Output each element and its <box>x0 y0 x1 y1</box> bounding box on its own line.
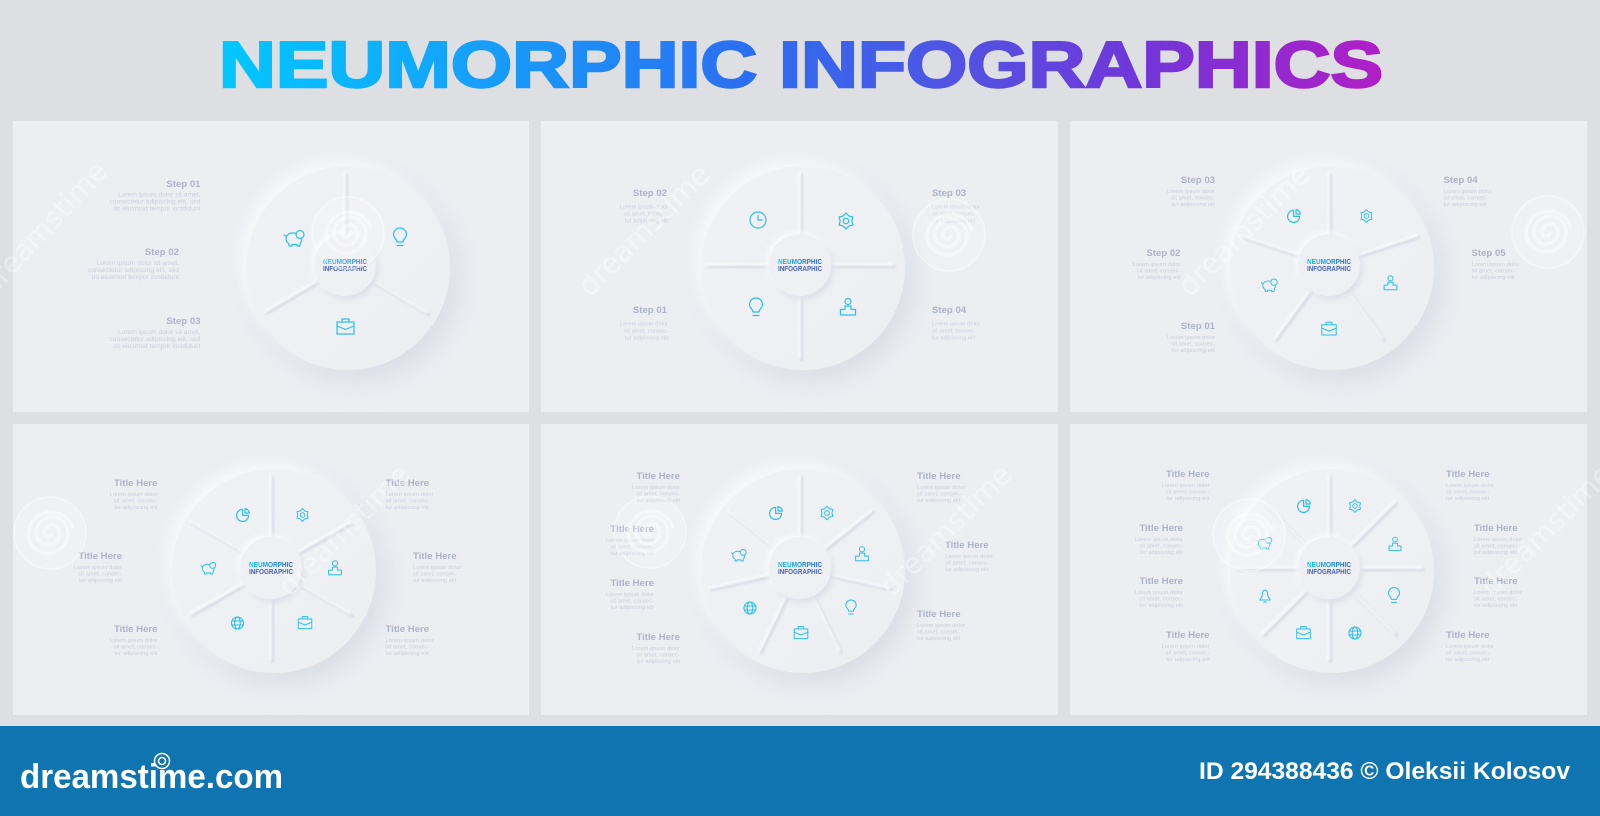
text block: title 1 right: Title Here <box>1446 469 1490 480</box>
text block: title 1 left: tur adipiscing elit <box>1166 496 1210 502</box>
text block: title bottom left: Title Here <box>114 624 158 635</box>
text block: title middle right <box>945 540 993 573</box>
text block: title upper middle left: tur adipiscing elit <box>611 551 654 557</box>
text block: Step 02: Step 02 <box>633 188 667 199</box>
text block: title 1 left: sit amet, consec- <box>1166 490 1210 496</box>
text block: Step 04 <box>1444 175 1492 208</box>
text block: Step 02: Lorem ipsum dolor sit amet, <box>96 260 179 267</box>
circular diagram: three segments <box>240 160 458 380</box>
text block: title middle left: Title Here <box>78 551 122 562</box>
circular diagram: four segments: INFOGRAPHIC <box>778 266 822 273</box>
text block: Step 03: tur adipiscing elit <box>1172 202 1215 208</box>
text block: title 2 right <box>1474 523 1522 556</box>
text block: title bottom right: Lorem ipsum dolor <box>917 623 965 629</box>
text block: Step 01: do eiusmod tempor incididunt <box>113 206 201 212</box>
circular diagram: five segments: NEUMORPHIC <box>1307 259 1351 266</box>
icon: pie chart <box>1298 500 1310 512</box>
text block: title 2 right: tur adipiscing elit <box>1474 550 1518 556</box>
image id and credit: ID 294388436 © Oleksii Kolosov <box>1199 758 1571 785</box>
icon: briefcase <box>298 617 312 629</box>
text block: title middle right: Title Here <box>945 540 989 551</box>
text block: title bottom right: tur adipiscing elit <box>386 651 429 657</box>
text block: title top left: Lorem ipsum dolor <box>632 485 680 491</box>
text block: Step 05: tur adipiscing elit <box>1472 275 1515 281</box>
text block: title 1 right: Lorem ipsum dolor <box>1446 483 1494 489</box>
text block: title 1 left: Lorem ipsum dolor <box>1161 483 1210 489</box>
icon: light bulb <box>1388 588 1400 602</box>
text block: Step 02 <box>88 247 179 281</box>
circular diagram: seven segments: INFOGRAPHIC <box>778 569 822 576</box>
circular diagram: three segments: INFOGRAPHIC <box>323 266 367 273</box>
circular diagram: six segments <box>166 463 384 683</box>
circular diagram: six segments: NEUMORPHIC <box>249 562 293 569</box>
watermark overlay: dreamstime <box>271 457 417 603</box>
text block: title 3 right: sit amet, consec- <box>1474 596 1518 602</box>
text block: title upper middle left: sit amet, consec- <box>610 544 654 550</box>
text block: title bottom right: tur adipiscing elit <box>917 636 961 642</box>
text block: title middle left: Lorem ipsum dolor <box>74 565 122 571</box>
text block: title top right: Title Here <box>386 478 429 489</box>
text block: title lower middle left: sit amet, consec- <box>610 598 654 604</box>
text block: title 2 left: tur adipiscing elit <box>1140 550 1183 556</box>
text block: Step 03 <box>109 316 201 350</box>
text block: Step 03: tur adipiscing elit <box>932 218 976 224</box>
text block: title bottom right: Lorem ipsum dolor <box>386 638 434 644</box>
text block: title 1 left: Title Here <box>1166 469 1210 480</box>
icon: pie chart <box>237 509 249 521</box>
text block: title upper middle left <box>606 524 654 557</box>
text block: title 2 left: Lorem ipsum dolor <box>1135 537 1183 543</box>
circular diagram: five segments <box>1224 160 1442 380</box>
text block: Step 01: tur adipiscing elit <box>625 336 668 342</box>
text block: title 2 right: sit amet, consec- <box>1474 544 1518 550</box>
text block: title 4 right: sit amet, consec- <box>1446 650 1490 656</box>
text block: Step 04: tur adipiscing elit <box>932 336 976 342</box>
icon: gear <box>1349 500 1361 512</box>
text block: title top left: Title Here <box>636 471 680 482</box>
text block: Step 03: Step 03 <box>932 188 966 199</box>
text block: title top left: tur adipiscing elit <box>114 505 158 511</box>
circular diagram: six segments: INFOGRAPHIC <box>249 569 293 576</box>
text block: title 2 right: Lorem ipsum dolor <box>1474 537 1522 543</box>
text block: title upper middle left: Title Here <box>610 524 654 535</box>
text block: title 2 left: sit amet, consec- <box>1139 544 1183 550</box>
panel: six titles <box>13 424 529 715</box>
icon: gear <box>821 506 833 520</box>
icon: piggy bank <box>1261 279 1277 291</box>
text block: Step 03: sit amet, consec- <box>1171 196 1215 202</box>
text block: title 1 left <box>1161 469 1210 502</box>
text block: Step 04: sit amet, consec- <box>932 328 976 334</box>
text block: Step 01: sit amet, consec- <box>624 328 668 334</box>
text block: Step 04: tur adipiscing elit <box>1444 202 1487 208</box>
text block: title 2 left <box>1135 523 1183 556</box>
icon: dreamstime spiral <box>154 754 170 768</box>
text block: title top right: Lorem ipsum dolor <box>386 492 434 498</box>
text block: Step 03: do eiusmod tempor incididunt <box>113 343 201 350</box>
text block: title bottom right: sit amet, consec- <box>917 630 961 636</box>
icon: light bulb <box>750 298 762 316</box>
text block: title top right: sit amet, consec- <box>386 498 429 504</box>
text block: title 1 right <box>1446 469 1494 502</box>
panel: three steps <box>13 121 529 412</box>
footer logo wordmark: dreamstime.com <box>20 758 283 796</box>
text block: title bottom left <box>109 624 158 657</box>
text block: Step 01: Lorem ipsum dolor <box>620 322 668 328</box>
watermark overlay: dreamstime <box>1171 157 1317 303</box>
icon: person <box>1389 537 1401 550</box>
icon: gear <box>839 213 853 229</box>
text block: Step 02: tur adipiscing elit <box>1137 275 1181 281</box>
text block: title middle right: tur adipiscing elit <box>413 578 457 584</box>
text block: Step 01 <box>109 179 201 212</box>
text block: Step 05: Lorem ipsum dolor <box>1472 262 1520 268</box>
text block: title middle right: sit amet, consec- <box>413 572 457 578</box>
text block: title lower middle left: Title Here <box>610 578 654 589</box>
text block: Step 01: consectetur adipiscing elit, sed <box>109 198 201 206</box>
panel: eight titles <box>1070 424 1587 715</box>
text block: title middle left <box>74 551 122 584</box>
text block: Step 01: Step 01 <box>166 179 201 190</box>
text block: Step 01: sit amet, consec- <box>1171 342 1215 348</box>
watermark overlay <box>0 154 1600 603</box>
text block: Step 01: Step 01 <box>633 305 668 316</box>
icon: person <box>856 547 868 561</box>
text block: Step 04: sit amet, consec- <box>1444 196 1487 202</box>
text block: Step 01: Lorem ipsum dolor sit amet, <box>118 192 201 198</box>
text block: Step 02: tur adipiscing elit <box>625 218 668 224</box>
icon: piggy bank <box>201 562 216 574</box>
text block: title 4 right: Title Here <box>1446 630 1490 641</box>
text block: Step 04: Lorem ipsum dolor <box>1444 189 1492 195</box>
text block: Step 01 <box>1167 321 1216 354</box>
text block: title bottom right: sit amet, consec- <box>386 644 429 650</box>
text block: title top right: tur adipiscing elit <box>917 498 961 504</box>
text block: title 2 left: Title Here <box>1139 523 1183 534</box>
text block: title 3 right: Lorem ipsum dolor <box>1474 590 1522 596</box>
icon: gear <box>1361 210 1372 222</box>
icon: bell <box>1260 590 1270 602</box>
text block: title middle right: sit amet, consec- <box>945 560 989 566</box>
text block: title 3 left: Lorem ipsum dolor <box>1135 590 1183 596</box>
icon: pie chart <box>1288 210 1300 222</box>
text block: title 4 left: sit amet, consec- <box>1166 650 1210 656</box>
panel: seven titles <box>541 424 1058 715</box>
text block: title bottom right <box>917 609 965 642</box>
text block: Step 03 <box>932 188 980 224</box>
text block: title middle right: Title Here <box>413 551 457 562</box>
text block: title bottom right: Title Here <box>386 624 429 635</box>
text block: title top right: Lorem ipsum dolor <box>917 485 965 491</box>
text block: title 1 right: tur adipiscing elit <box>1446 496 1490 502</box>
text block: title top left: tur adipiscing elit <box>637 498 680 504</box>
icon: gear <box>297 509 308 521</box>
text block: title 1 right: sit amet, consec- <box>1446 490 1490 496</box>
text block: title 4 right <box>1446 630 1494 663</box>
text block: Step 03: sit amet, consec- <box>932 212 976 218</box>
icon: globe <box>1349 627 1361 639</box>
text block: Step 04: Lorem ipsum dolor <box>932 322 980 328</box>
text block: title 4 left: tur adipiscing elit <box>1166 657 1210 663</box>
text block: Step 01: Step 01 <box>1181 321 1216 332</box>
text block: Step 01: Lorem ipsum dolor <box>1167 335 1215 341</box>
text block: Step 02: Lorem ipsum dolor <box>1132 262 1181 268</box>
text block: title bottom right <box>386 624 434 657</box>
text block: Step 02: sit amet, consec- <box>624 212 668 218</box>
text block: title bottom left: sit amet, consec- <box>114 644 158 650</box>
text block: title 4 left <box>1161 630 1210 663</box>
text block: title 3 left: Title Here <box>1139 576 1183 587</box>
text block: title 2 right: Title Here <box>1474 523 1518 534</box>
text block: Step 01: tur adipiscing elit <box>1172 348 1215 354</box>
text block: title top right <box>917 471 965 504</box>
text block: title bottom left: sit amet, consec- <box>636 652 680 658</box>
icon: person <box>840 298 856 315</box>
text block: title top left: Title Here <box>114 478 158 489</box>
text block: title 3 right: tur adipiscing elit <box>1474 603 1518 609</box>
text block: Step 02: Lorem ipsum dolor <box>620 204 668 210</box>
watermark overlay: dreamstime <box>571 157 717 303</box>
text block: title 3 left: tur adipiscing elit <box>1140 603 1183 609</box>
text block: title bottom left: Lorem ipsum dolor <box>109 638 158 644</box>
text block: Step 05 <box>1472 248 1520 281</box>
circular diagram: four segments <box>695 160 913 380</box>
circular diagram: eight segments: NEUMORPHIC <box>1307 562 1351 569</box>
text block: Step 04: Step 04 <box>932 305 967 316</box>
circular diagram: four segments: NEUMORPHIC <box>778 259 822 266</box>
text block: title middle left: sit amet, consec- <box>78 572 122 578</box>
text block: Step 02: sit amet, consec- <box>1137 268 1181 274</box>
text block: title bottom right: Title Here <box>917 609 961 620</box>
icon: light bulb <box>846 600 856 614</box>
text block: Step 02: do eiusmod tempor incididunt <box>92 274 179 281</box>
text block: title lower middle left: tur adipiscing elit <box>611 605 654 611</box>
text block: title top left <box>109 478 158 511</box>
text block: title bottom left: Lorem ipsum dolor <box>632 646 680 652</box>
circular diagram: three segments: NEUMORPHIC <box>323 259 367 266</box>
icon: briefcase <box>337 319 354 334</box>
text block: title middle right: Lorem ipsum dolor <box>413 565 461 571</box>
text block: title 3 right <box>1474 576 1522 609</box>
text block: title 4 left: Lorem ipsum dolor <box>1161 644 1210 650</box>
circular diagram: five segments: INFOGRAPHIC <box>1307 266 1351 273</box>
text block: title top right: Title Here <box>917 471 961 482</box>
text block: Step 02 <box>620 188 668 224</box>
text block: title lower middle left: Lorem ipsum dolor <box>606 592 654 598</box>
text block: title middle right <box>413 551 461 584</box>
footer band <box>0 726 1600 816</box>
watermark overlay: dreamstime <box>873 457 1019 603</box>
text block: title middle right: tur adipiscing elit <box>945 567 989 573</box>
circular diagram: seven segments: NEUMORPHIC <box>778 562 822 569</box>
icon: person <box>1384 276 1397 290</box>
text block: title top left <box>632 471 680 504</box>
text block: title top left: sit amet, consec- <box>636 492 680 498</box>
text block: title middle right: Lorem ipsum dolor <box>945 554 993 560</box>
text block: Step 02: Step 02 <box>1146 248 1180 259</box>
text block: title bottom left <box>632 632 680 665</box>
icon: briefcase <box>794 627 808 639</box>
text block: Step 03: Lorem ipsum dolor <box>932 204 980 210</box>
text block: Step 02 <box>1132 248 1181 281</box>
icon: briefcase <box>1322 322 1336 335</box>
text block: title middle left: tur adipiscing elit <box>79 578 122 584</box>
text block: title bottom left: Title Here <box>636 632 680 643</box>
title: NEUMORPHIC INFOGRAPHICS <box>219 28 1383 101</box>
text block: title 4 right: tur adipiscing elit <box>1446 657 1490 663</box>
text block: title 4 right: Lorem ipsum dolor <box>1446 644 1494 650</box>
text block: title 3 left <box>1135 576 1183 609</box>
icon: piggy bank <box>284 230 304 246</box>
text block: Step 01 <box>620 305 668 342</box>
icon: light bulb <box>394 228 406 246</box>
circular diagram: eight segments: INFOGRAPHIC <box>1307 569 1351 576</box>
text block: title top left: Lorem ipsum dolor <box>109 492 158 498</box>
icon: piggy bank <box>731 549 746 561</box>
text block: title lower middle left <box>606 578 654 611</box>
icon: globe <box>232 617 244 629</box>
text block: Step 03 <box>1167 175 1215 208</box>
icon: briefcase <box>1297 627 1310 639</box>
icon: piggy bank <box>1257 537 1272 549</box>
text block: Step 04: Step 04 <box>1444 175 1478 186</box>
panel: five steps <box>1070 121 1587 412</box>
text block: Step 05: sit amet, consec- <box>1472 268 1515 274</box>
text block: title 4 left: Title Here <box>1166 630 1210 641</box>
text block: title 3 left: sit amet, consec- <box>1139 596 1183 602</box>
text block: title bottom left: tur adipiscing elit <box>114 651 158 657</box>
circular diagram: eight segments <box>1224 463 1442 683</box>
text block: Step 03: Lorem ipsum dolor sit amet, <box>118 329 201 336</box>
text block: Step 03: Lorem ipsum dolor <box>1167 189 1215 195</box>
text block: title upper middle left: Lorem ipsum dolor <box>606 538 654 544</box>
icon: pie chart <box>770 507 782 519</box>
icon: globe <box>744 602 756 614</box>
text block: Step 04 <box>932 305 980 342</box>
panel: four steps <box>541 121 1058 412</box>
text block: Step 02: Step 02 <box>145 247 179 258</box>
text block: title top left: sit amet, consec- <box>114 498 158 504</box>
text block: title 3 right: Title Here <box>1474 576 1518 587</box>
text block: Step 03: Step 03 <box>1181 175 1215 186</box>
text block: Step 05: Step 05 <box>1472 248 1506 259</box>
text block: title top right <box>386 478 434 511</box>
icon: person <box>329 561 341 575</box>
text block: title top right: sit amet, consec- <box>917 492 961 498</box>
text block: Step 03: consectetur adipiscing elit, sed <box>109 336 201 343</box>
text block: title bottom left: tur adipiscing elit <box>637 659 680 665</box>
text block: title top right: tur adipiscing elit <box>386 505 429 511</box>
circular diagram: seven segments <box>695 463 913 683</box>
icon: clock <box>750 212 766 228</box>
text block: Step 02: consectetur adipiscing elit, sed <box>88 267 179 274</box>
text block: Step 03: Step 03 <box>166 316 200 327</box>
